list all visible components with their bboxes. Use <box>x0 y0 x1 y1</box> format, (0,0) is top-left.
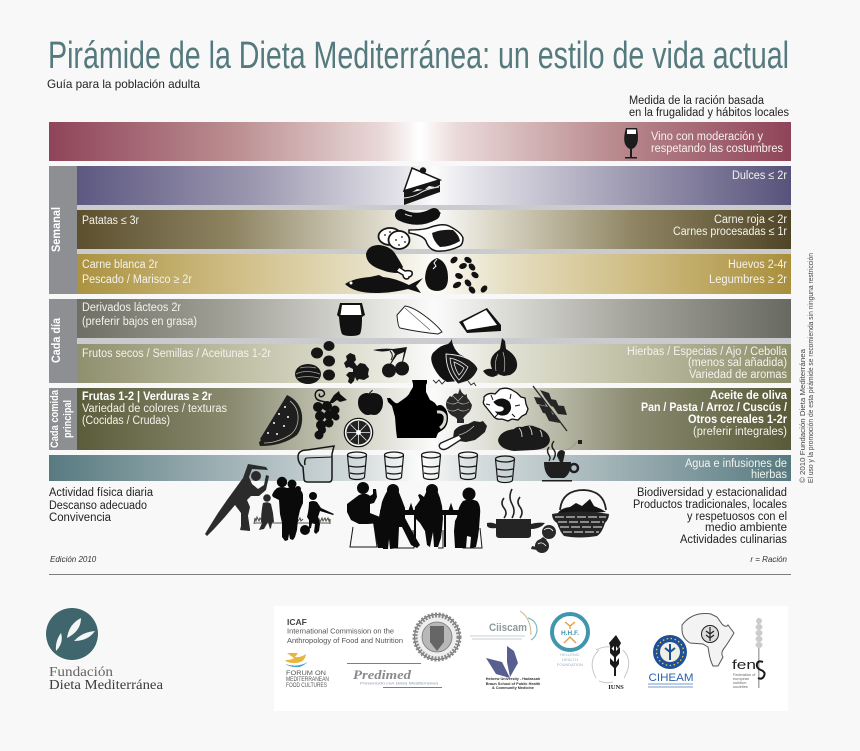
icon: bread <box>498 426 550 451</box>
logo: Hellenic Health Foundation: H.H.F. <box>561 630 579 637</box>
icon: cake <box>404 167 440 205</box>
sidebar: Cada comida principal <box>49 388 77 450</box>
copyright vertical text <box>798 253 815 483</box>
icon: steaming pot <box>487 489 545 538</box>
icon: steak <box>409 225 463 251</box>
band: dairy: (preferir bajos en grasa) <box>82 316 197 328</box>
text: lifestyle left: Actividad física diaria <box>49 487 154 499</box>
copyright vertical text: © 2010 Fundación Dieta Mediterránea <box>798 348 807 483</box>
logo: Fundación Dieta Mediterránea: Fundación <box>49 664 113 679</box>
band: water: Agua e infusiones de <box>685 458 787 470</box>
icon: parsley <box>344 353 369 384</box>
logo: FENS <box>732 618 765 689</box>
logo: Hebrew University <box>486 646 541 690</box>
edition note: Edición 2010 <box>50 555 97 564</box>
logo: Forum on Mediterranean Food Cultures: FOOD CULTURES <box>286 683 327 689</box>
icon: onion <box>431 337 478 386</box>
sidebar: Semanal: Semanal <box>49 207 63 252</box>
band: water: hierbas <box>751 469 787 481</box>
logo: FENS: fen <box>732 657 756 672</box>
band: white meat, fish, eggs, legumes: Legumbres ≥ 2r <box>709 274 787 286</box>
logo: Fundación Dieta Mediterránea <box>46 608 163 692</box>
icon: olives <box>373 347 409 378</box>
text: lifestyle left <box>49 487 154 524</box>
sidebar: Semanal <box>49 166 77 294</box>
logo: university seal <box>414 614 460 660</box>
icon: beans <box>449 255 489 295</box>
band: water <box>49 455 791 481</box>
icon: chicken leg <box>366 245 412 279</box>
logo: CIHEAM: CIHEAM <box>648 672 694 684</box>
panel: partner logos <box>274 606 788 711</box>
icon: family <box>254 477 334 541</box>
band: fruit, vegetables, cereals, oil: Pan / Pasta / Arroz / Cuscús / <box>641 402 788 414</box>
band: fruit, vegetables, cereals, oil: Otros cereales 1-2r <box>688 414 787 426</box>
band: fruit, vegetables, cereals, oil: (preferir integrales) <box>693 426 787 438</box>
logo: CIHEAM <box>648 635 694 687</box>
icon: sausage <box>401 211 441 219</box>
band: nuts and herbs: (menos sal añadida) <box>688 357 787 369</box>
text: lifestyle right: Biodiversidad y estacionalidad <box>637 487 787 499</box>
logo: Forum on Mediterranean Food Cultures: MEDITERRANEAN <box>286 677 329 683</box>
icon: lettuce <box>483 388 528 421</box>
logo: Hebrew University: Braun School of Public Health <box>486 682 541 686</box>
copyright vertical text: El uso y la promoción de esta pirámide se recomienda sin ninguna restricción <box>806 253 815 483</box>
icon: fish <box>345 275 423 293</box>
icon: olive oil jar <box>387 380 448 438</box>
band: wine: respetando las costumbres <box>651 143 783 155</box>
logo: ICAF: Anthropology of Food and Nutrition <box>287 638 403 645</box>
icon: wine glass <box>624 128 638 158</box>
icon: teacup with tea bag <box>542 440 582 482</box>
sidebar: Cada comida principal: Cada comida <box>49 389 61 448</box>
icon: water glasses <box>348 452 514 482</box>
serving note: Medida de la ración basada <box>629 95 765 107</box>
band: nuts and herbs: Frutos secos / Semillas / Aceitunas 1-2r <box>82 348 271 360</box>
band: wine: Vino con moderación y <box>651 131 763 143</box>
sidebar: Cada día: Cada día <box>49 318 63 363</box>
icon: wheat <box>533 386 567 431</box>
band: fruit, vegetables, cereals, oil: Aceite de oliva <box>710 390 788 402</box>
logo: FENS: european <box>733 677 749 681</box>
icon: nuts and seeds <box>295 341 335 384</box>
band: sweets: Dulces ≤ 2r <box>732 170 787 182</box>
band: wine <box>49 122 791 161</box>
logo: ICAF: International Commission on the <box>287 628 394 636</box>
gap strips behind bands <box>77 205 791 344</box>
logo: Predimed: Prevención con Dieta Mediterránea <box>360 680 439 686</box>
logo: Hellenic Health Foundation: HEALTH <box>562 657 578 662</box>
band: potatoes and red meat: Patatas ≤ 3r <box>82 215 139 227</box>
band: fruit, vegetables, cereals, oil: Frutas 1-2 | Verduras ≥ 2r <box>82 391 212 403</box>
logo: ICAF: ICAF <box>287 617 307 627</box>
text: lifestyle right <box>633 487 787 546</box>
serving note <box>629 95 789 119</box>
serving note: en la frugalidad y hábitos locales <box>629 107 789 119</box>
logo: Forum on Mediterranean Food Cultures: FORUM ON <box>286 671 326 677</box>
logo: FENS: nutrition <box>733 681 747 685</box>
band: white meat, fish, eggs, legumes: Huevos 2-4r <box>728 259 787 271</box>
band: nuts and herbs <box>77 344 791 383</box>
band: nuts and herbs: Variedad de aromas <box>689 369 787 381</box>
icon: basket <box>552 490 609 538</box>
logo: FENS: societies <box>733 685 748 689</box>
icon: person exercising <box>205 464 269 536</box>
logo: Hellenic Health Foundation: HELLENIC <box>560 652 580 657</box>
band: dairy <box>77 299 791 338</box>
logo: Predimed <box>347 663 442 688</box>
band: nuts and herbs: Hierbas / Especias / Ajo / Cebolla <box>627 346 788 358</box>
logo: Fundación Dieta Mediterránea: Dieta Mediterránea <box>49 677 163 692</box>
text: lifestyle left: Descanso adecuado <box>49 500 147 512</box>
icon: mushrooms <box>531 525 556 553</box>
text: lifestyle right: medio ambiente <box>705 522 787 534</box>
icon: orange slice <box>344 418 373 447</box>
band: dairy: Derivados lácteos 2r <box>82 302 181 314</box>
text: lifestyle left: Convivencia <box>49 512 112 524</box>
band: potatoes and red meat: Carne roja < 2r <box>714 214 787 226</box>
band: potatoes and red meat <box>77 210 791 249</box>
logo: Predimed: Predimed <box>353 667 412 682</box>
logo: Hellenic Health Foundation <box>552 614 588 667</box>
icon: egg <box>425 258 448 291</box>
logo: Hebrew University: Hebrew University - Hadassah <box>486 677 541 681</box>
legend: r = Ración: r = Ración <box>750 555 788 564</box>
logo: ICAF <box>287 617 403 645</box>
icon: chard <box>439 421 487 450</box>
logo: IUNS <box>592 635 629 691</box>
logo: IUNS: IUNS <box>608 684 624 691</box>
band: fruit, vegetables, cereals, oil: Variedad de colores / texturas <box>82 403 227 415</box>
logo: Hellenic Health Foundation: FOUNDATION <box>557 662 583 667</box>
icon: hard cheese <box>459 308 501 333</box>
icon: people at table <box>347 482 482 549</box>
logo: Forum on Mediterranean Food Cultures <box>285 653 329 689</box>
logo: Africa map <box>682 614 734 666</box>
subtitle: Guía para la población adulta <box>47 77 200 91</box>
band: white meat, fish, eggs, legumes: Carne blanca 2r <box>82 259 158 271</box>
icon: watermelon <box>259 395 302 446</box>
band: potatoes and red meat: Carnes procesadas ≤ 1r <box>673 226 787 238</box>
logo: Ciiscam <box>470 611 537 640</box>
icon: yogurt <box>337 303 365 336</box>
logo: Ciiscam: Ciiscam <box>489 622 527 634</box>
band: white meat, fish, eggs, legumes <box>77 254 791 294</box>
logo: FENS: Federation of <box>733 673 756 677</box>
icon: soft cheese <box>397 306 442 334</box>
sidebar: Cada comida principal: principal <box>62 400 74 438</box>
band: white meat, fish, eggs, legumes: Pescado / Marisco ≥ 2r <box>82 274 192 286</box>
icon: potatoes <box>378 228 410 249</box>
band: sweets <box>77 166 791 205</box>
icon: water jug <box>298 446 334 482</box>
band: fruit, vegetables, cereals, oil: (Cocidas / Crudas) <box>82 415 170 427</box>
logo: Hebrew University: & Community Medicine <box>492 686 534 690</box>
text: lifestyle right: y respetuosos con el <box>687 511 787 523</box>
icon: artichoke <box>446 388 472 423</box>
text: lifestyle right: Actividades culinarias <box>680 534 787 546</box>
text: lifestyle right: Productos tradicionales, locales <box>633 499 787 511</box>
icon: garlic <box>483 338 517 377</box>
icon: grapes <box>313 390 347 440</box>
band: fruit, vegetables, cereals, oil <box>77 388 791 450</box>
sidebar: Cada día <box>49 299 77 383</box>
icon: apple <box>358 390 383 415</box>
